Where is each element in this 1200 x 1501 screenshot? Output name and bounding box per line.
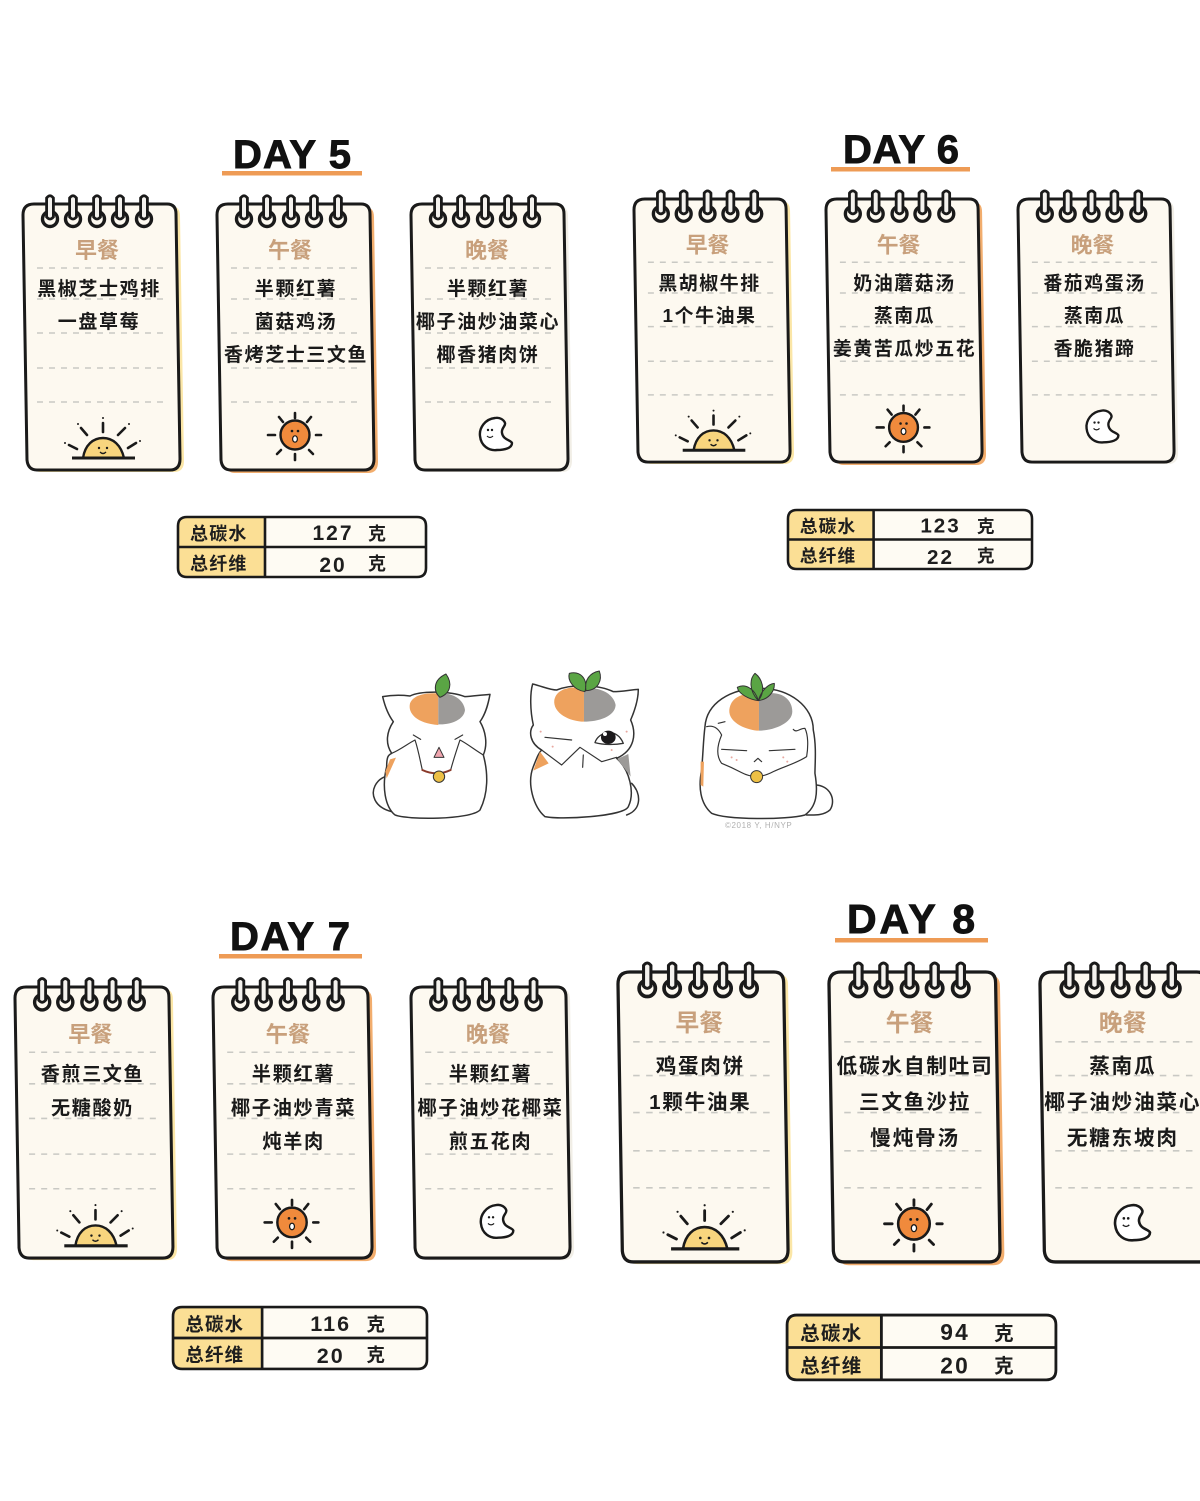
table: day 5 totals xyxy=(178,517,426,577)
table: day 7 totals: 116 xyxy=(310,1311,351,1336)
illustration: cat holding cheeks xyxy=(700,673,833,819)
panel: day 6 dinner note: 蒸南瓜 xyxy=(1064,305,1125,326)
panel: day 8 dinner note xyxy=(1040,963,1200,1264)
panel: day 7 breakfast note: 无糖酸奶 xyxy=(51,1096,134,1119)
panel: day 6 breakfast note: 黑胡椒牛排 xyxy=(658,273,761,293)
table: day 8 totals: 总碳水 xyxy=(800,1323,863,1345)
table: day 6 totals: 总纤维 xyxy=(800,546,856,566)
panel: day 6 breakfast note: 1个牛油果 xyxy=(663,305,757,326)
table: day 6 totals: 克 xyxy=(977,546,995,566)
panel: day 7 lunch note: 椰子油炒青菜 xyxy=(231,1097,356,1119)
panel: day 5 dinner note: 半颗红薯 xyxy=(447,278,529,300)
panel: day 7 lunch note xyxy=(213,979,376,1261)
panel: day 8 lunch note: 低碳水自制吐司 xyxy=(837,1055,994,1078)
panel: day 8 dinner note: 椰子油炒油菜心 xyxy=(1044,1091,1200,1114)
table: day 8 totals: 94 xyxy=(940,1319,970,1345)
panel: day 6 lunch note: 午餐 xyxy=(877,232,921,257)
panel: day 6 lunch note: 奶油蘑菇汤 xyxy=(853,273,956,293)
panel: day 5 dinner note: 椰香猪肉饼 xyxy=(436,344,540,366)
panel: day 6 lunch note: 姜黄苦瓜炒五花 xyxy=(833,337,976,359)
table: day 8 totals xyxy=(787,1315,1056,1380)
illustration: cats xyxy=(373,671,833,819)
table: day 6 totals: 克 xyxy=(977,517,995,537)
table: day 7 totals: 总纤维 xyxy=(185,1345,244,1366)
panel: day 5 dinner note: 椰子油炒油菜心 xyxy=(416,311,560,333)
table: day 7 totals: 克 xyxy=(367,1314,385,1335)
panel: day 8 dinner note: 无糖东坡肉 xyxy=(1067,1126,1179,1150)
table: day 5 totals: 127 xyxy=(312,522,354,545)
panel: day 8 lunch note: 慢炖骨汤 xyxy=(870,1127,960,1150)
panel: day 5 breakfast note: 早餐 xyxy=(75,238,119,263)
illustration: cat winking xyxy=(531,671,639,818)
panel: day 8 breakfast note: 早餐 xyxy=(675,1010,723,1037)
panel: day 6 breakfast note xyxy=(634,191,794,464)
panel: day 5 breakfast note: 黑椒芝士鸡排 xyxy=(37,278,161,300)
table: day 5 totals: 20 xyxy=(319,554,347,577)
panel: day 8 breakfast note xyxy=(618,963,792,1264)
panel: day 7 dinner note: 椰子油炒花椰菜 xyxy=(418,1097,564,1119)
illustration: cat covering eyes xyxy=(373,674,490,818)
title: DAY 5: DAY 5 xyxy=(233,133,351,177)
panel: day 5 dinner note: 晚餐 xyxy=(465,238,509,263)
title: DAY 7: DAY 7 xyxy=(230,915,350,959)
panel: day 7 breakfast note xyxy=(15,979,177,1260)
panel: day 7 breakfast note: 香煎三文鱼 xyxy=(41,1063,144,1086)
panel: day 5 lunch note: 菌菇鸡汤 xyxy=(255,311,337,333)
copyright note: ©2018 Y, H/NYP xyxy=(725,821,792,830)
title: DAY 8: DAY 8 xyxy=(847,896,975,942)
table: day 7 totals: 总碳水 xyxy=(185,1314,244,1335)
table: day 7 totals xyxy=(173,1307,427,1369)
panel: day 8 breakfast note: 1颗牛油果 xyxy=(649,1091,751,1114)
panel: day 6 dinner note: 晚餐 xyxy=(1071,232,1115,257)
panel: day 8 dinner note: 蒸南瓜 xyxy=(1089,1055,1156,1078)
panel: day 6 lunch note: 蒸南瓜 xyxy=(874,305,935,326)
panel: day 5 breakfast note: 一盘草莓 xyxy=(58,310,140,333)
table: day 6 totals xyxy=(788,510,1032,569)
table: day 8 totals: 克 xyxy=(994,1355,1014,1377)
panel: day 7 lunch note: 炖羊肉 xyxy=(262,1131,325,1153)
panel: day 7 lunch note: 午餐 xyxy=(266,1022,310,1047)
panel: day 7 dinner note: 煎五花肉 xyxy=(449,1130,532,1153)
panel: day 7 dinner note: 半颗红薯 xyxy=(449,1063,532,1086)
panel: day 8 dinner note: 晚餐 xyxy=(1099,1010,1147,1037)
panel: day 5 dinner note xyxy=(411,196,572,472)
table: day 6 totals: 22 xyxy=(927,546,954,569)
panel: day 7 breakfast note: 早餐 xyxy=(68,1022,113,1047)
table: day 5 totals: 总纤维 xyxy=(190,554,248,574)
table: day 8 totals: 总纤维 xyxy=(800,1355,863,1377)
panel: day 7 dinner note: 晚餐 xyxy=(466,1022,510,1047)
panel: day 6 dinner note: 香脆猪蹄 xyxy=(1054,338,1135,359)
table: day 6 totals: 123 xyxy=(920,515,961,538)
panel: day 6 lunch note xyxy=(826,191,986,465)
panel: day 7 lunch note: 半颗红薯 xyxy=(252,1063,335,1086)
panel: day 5 lunch note: 午餐 xyxy=(268,238,312,263)
table: day 8 totals: 克 xyxy=(994,1323,1014,1345)
panel: day 5 lunch note xyxy=(217,196,378,473)
panel: day 6 breakfast note: 早餐 xyxy=(686,232,730,257)
panel: day 8 lunch note: 三文鱼沙拉 xyxy=(859,1090,971,1114)
panel: day 5 lunch note: 半颗红薯 xyxy=(255,278,337,300)
panel: day 6 dinner note xyxy=(1018,191,1178,464)
panel: day 6 dinner note: 番茄鸡蛋汤 xyxy=(1043,273,1146,293)
table: day 5 totals: 克 xyxy=(368,554,386,574)
table: day 8 totals: 20 xyxy=(940,1352,970,1378)
table: day 5 totals: 克 xyxy=(368,524,386,544)
title: DAY 6: DAY 6 xyxy=(843,128,959,172)
table: day 6 totals: 总碳水 xyxy=(800,517,856,537)
panel: day 5 breakfast note xyxy=(23,196,184,472)
table: day 7 totals: 20 xyxy=(317,1343,345,1368)
panel: day 8 lunch note: 午餐 xyxy=(886,1010,934,1037)
panel: day 5 lunch note: 香烤芝士三文鱼 xyxy=(224,343,368,366)
panel: day 8 lunch note xyxy=(829,963,1004,1265)
table: day 7 totals: 克 xyxy=(367,1345,385,1366)
panel: day 7 dinner note xyxy=(411,979,574,1260)
panel: day 8 breakfast note: 鸡蛋肉饼 xyxy=(656,1055,745,1078)
table: day 5 totals: 总碳水 xyxy=(190,524,248,544)
